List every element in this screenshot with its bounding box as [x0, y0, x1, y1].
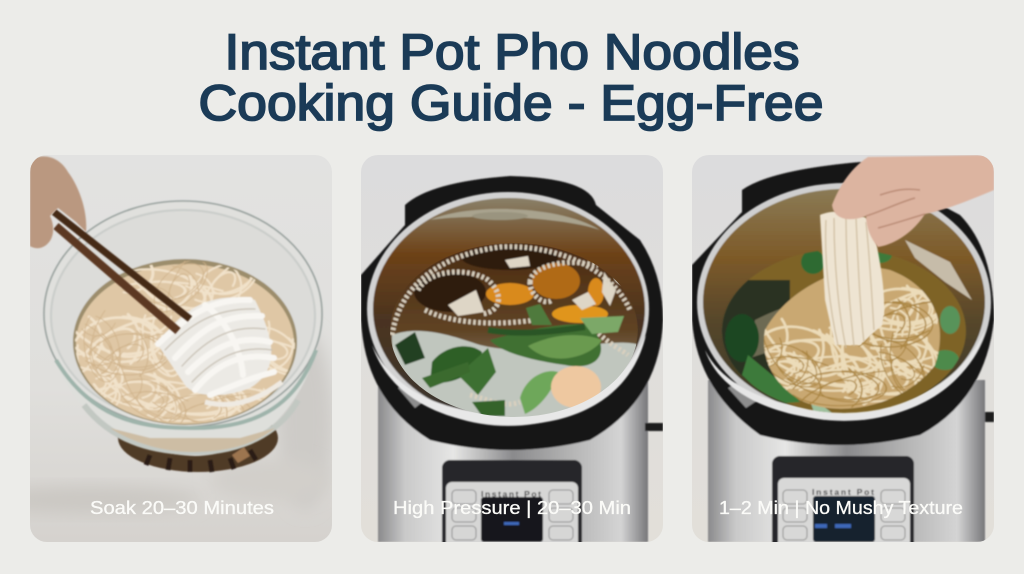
greens [395, 304, 624, 416]
foam [392, 247, 630, 404]
title: Instant Pot Pho Noodles [224, 24, 800, 80]
broth with vegetables [390, 243, 642, 420]
control panel: Instant Pot [812, 487, 874, 497]
control panel [442, 460, 582, 552]
panel: soak noodles [0, 155, 333, 542]
title: Cooking Guide - Egg-Free [198, 75, 824, 131]
icon: pressure cooker body [361, 176, 663, 552]
noodle tangle [763, 268, 941, 410]
icon: chopsticks [54, 212, 190, 331]
panel: high pressure [361, 155, 663, 552]
icon: glass bowl [44, 201, 322, 456]
icon: pressure cooker body [692, 162, 994, 550]
icon: hand [832, 155, 994, 247]
icon: wooden coaster [117, 425, 279, 474]
greens [725, 247, 960, 415]
panel: finish noodles [692, 155, 994, 550]
control panel: Instant Pot [481, 489, 541, 499]
broth with noodles [718, 247, 966, 420]
carrot slice [551, 366, 601, 408]
icon: steel pot interior [697, 183, 991, 421]
caption: High Pressure | 20–30 Min [393, 498, 631, 518]
lifted noodles [820, 211, 884, 348]
icon: steel pot interior [367, 192, 649, 426]
icon: hand [30, 156, 86, 248]
caption: 1–2 Min | No Mushy Texture [719, 498, 963, 518]
title [198, 24, 824, 131]
white vegetables [448, 256, 642, 316]
caption: Soak 20–30 Minutes [90, 498, 274, 518]
carrots [486, 263, 608, 323]
white noodle bundle [158, 297, 274, 395]
control panel [772, 456, 914, 550]
noodles in water [72, 258, 298, 426]
